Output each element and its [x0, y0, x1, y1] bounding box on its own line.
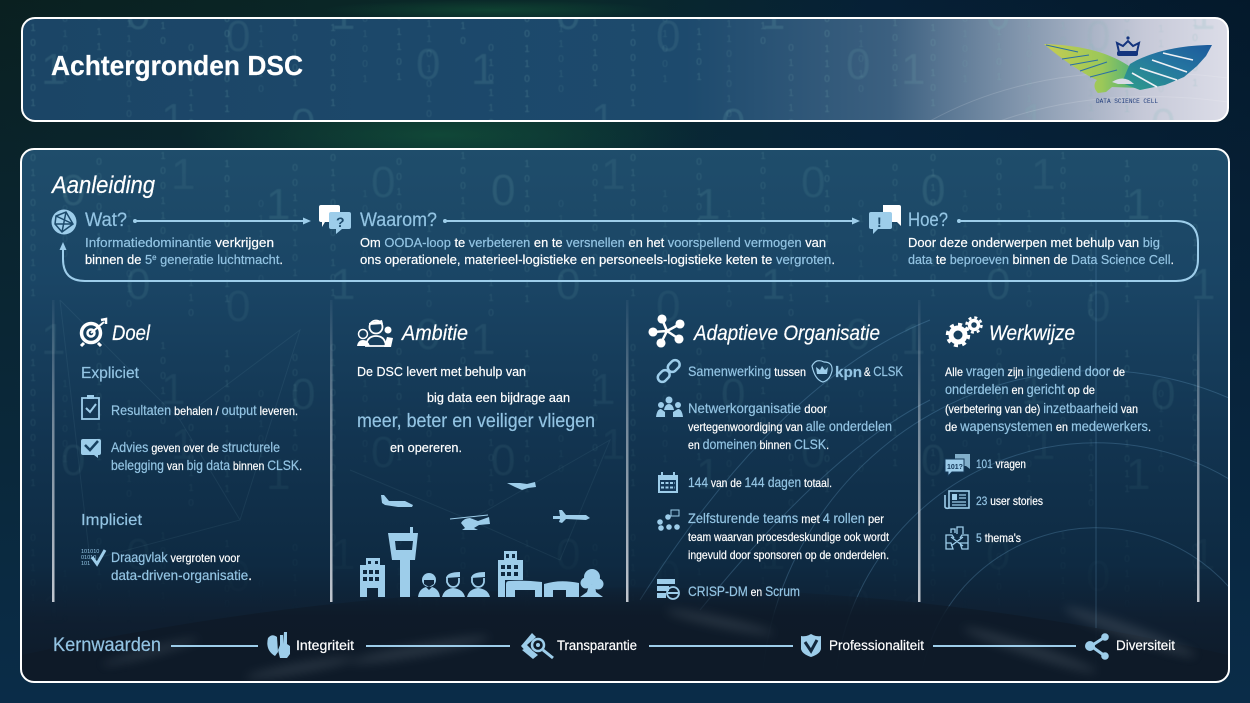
icon: soldier: [442, 572, 465, 597]
text: draagvlak: data-driven-organisatie.: [111, 567, 252, 583]
icon: target: [81, 319, 106, 346]
logo: kpn: kpn: [835, 364, 862, 381]
icon: user stories: [945, 491, 969, 508]
icon: binary check: 101010: [81, 549, 99, 555]
label: transparantie: Transparantie: [557, 638, 637, 653]
icon: hub network: [650, 316, 683, 346]
icon: network people: [656, 396, 683, 417]
connector lines: [171, 645, 1076, 647]
text: netwerkorganisatie: vertegenwoordiging van alle onderdelen: [688, 418, 892, 434]
icon: helicopter: [450, 515, 490, 530]
icon: calendar: [658, 472, 678, 493]
skyline illustration: [360, 527, 604, 597]
logo: kpn: [812, 361, 862, 382]
icon: advice check bubble: [81, 439, 101, 458]
logo: data science cell eagle: DATA SCIENCE CELL: [1096, 98, 1158, 105]
label: diversiteit: Diversiteit: [1116, 638, 1175, 653]
wat text: generatie luchtmacht: [157, 252, 280, 267]
heading: adaptieve organisatie: Adaptieve Organisatie: [692, 322, 880, 345]
text: werkwijze description: Alle vragen zijn ingediend door de: [945, 363, 1125, 379]
icon: oath hand with heart: [267, 632, 290, 658]
icon: office building: [360, 558, 385, 597]
icon: binary check: [81, 549, 105, 567]
text: werkwijze description: onderdelen en gericht op de: [945, 381, 1095, 397]
earth horizon: [227, 588, 1096, 681]
column: doel: [81, 319, 302, 583]
arrow: wat to waarom: [133, 218, 311, 224]
text: ambitie statement: [357, 364, 595, 455]
icon: 101 questions: 101?: [947, 464, 963, 471]
icon: share nodes: [1085, 633, 1109, 660]
icon: clipboard check: [82, 395, 99, 419]
waarom text: ons operationele, materieel-logistieke en personeels-logistieke keten te vergroten.: [360, 252, 835, 267]
waarom text: Om OODA-loop te verbeteren en te versnellen en het voorspellend vermogen van: [360, 235, 826, 250]
subheading: expliciet: Expliciet: [81, 365, 140, 382]
icon: network globe: [52, 210, 76, 234]
icon: 101 questions: [945, 454, 970, 476]
text: draagvlak: [111, 549, 252, 583]
icon: pilot: [418, 573, 440, 597]
text: 5 themas: 5 thema's: [976, 531, 1021, 545]
icon: transparency magnifier: [521, 633, 553, 659]
wat text: e: [152, 253, 157, 262]
icon: binary check: 101: [81, 561, 90, 567]
text: and clsk: & CLSK: [864, 363, 904, 379]
hoe text: [908, 235, 1174, 267]
icon: question speech bubbles: [319, 205, 351, 234]
text: netwerkorganisatie: en domeinen binnen CLSK.: [688, 436, 829, 452]
text: ambitie statement: en opereren.: [390, 440, 462, 455]
text: werkwijze description: [945, 363, 1151, 434]
section: aanleiding: [50, 172, 1198, 281]
text: werkwijze description: de wapensystemen en medewerkers.: [945, 418, 1151, 434]
icon: themes: [946, 527, 968, 549]
wat text: [85, 235, 283, 267]
wat text: .: [279, 252, 283, 267]
icon: medic: [467, 572, 490, 597]
icon: exclamation speech bubbles: !: [877, 214, 882, 230]
text: werkwijze description: (verbetering van de) inzetbaarheid van: [945, 400, 1138, 416]
wat heading: Wat?: [85, 210, 127, 231]
text: netwerkorganisatie: [688, 400, 892, 452]
text: 144 dagen: 144 van de 144 dagen totaal.: [688, 474, 832, 490]
icon: chain link: [656, 358, 681, 384]
heading: kernwaarden: Kernwaarden: [53, 635, 161, 656]
title: Achtergronden DSC: [51, 50, 303, 81]
waarom heading: Waarom?: [360, 210, 437, 231]
heading: aanleiding: Aanleiding: [50, 172, 156, 199]
text: draagvlak: Draagvlak vergroten voor: [111, 549, 240, 565]
text: ambitie statement: De DSC levert met behulp van: [357, 364, 526, 379]
wat text: Informatiedominantie verkrijgen: [85, 235, 274, 250]
icon: crisp-dm cycle: [657, 579, 679, 599]
waarom text: [360, 235, 835, 267]
label: professionaliteit: Professionaliteit: [829, 638, 924, 653]
icon: question speech bubbles: ?: [336, 214, 345, 230]
hoe heading: Hoe?: [908, 210, 948, 231]
heading: doel: Doel: [112, 322, 151, 345]
icon: building with hangars: [498, 551, 579, 597]
icon: exclamation speech bubbles: [869, 205, 901, 234]
text: ambitie statement: big data een bijdrage aan: [427, 390, 570, 405]
text: resultaten: Resultaten behalen / output leveren.: [111, 402, 298, 418]
text: samenwerking: Samenwerking tussen: [688, 363, 806, 379]
dividers: [52, 300, 1200, 602]
icon: control tower: [388, 527, 418, 597]
text: zelfsturende teams: Zelfsturende teams met 4 rollen per: [688, 510, 884, 526]
panel: header: [22, 18, 1228, 121]
heading: werkwijze: Werkwijze: [989, 322, 1075, 345]
icon: tree: [580, 569, 604, 597]
hoe text: Door deze onderwerpen met behulp van big: [908, 235, 1160, 250]
heading: ambitie: Ambitie: [400, 322, 468, 345]
text: zelfsturende teams: [688, 510, 890, 562]
text: advies: [111, 439, 302, 473]
icon: personnel: [357, 320, 393, 347]
icon: binary check: 01010: [81, 555, 96, 561]
icon: gears: [948, 318, 982, 346]
arrow: hoe loop back to wat: [60, 219, 1198, 281]
panel: main: [21, 149, 1229, 682]
icon: self-organising team: [657, 510, 680, 531]
text: 23 user stories: 23 user stories: [976, 494, 1043, 508]
text: zelfsturende teams: team waarvan procesdeskundige ook wordt: [688, 530, 890, 544]
column: ambitie: [357, 320, 604, 597]
hoe text: data te beproeven binnen de Data Science Cell.: [908, 252, 1174, 267]
row: kernwaarden: [53, 632, 1175, 660]
column: adaptieve organisatie: [650, 316, 904, 599]
subheading: impliciet: Impliciet: [81, 512, 143, 529]
label: integriteit: Integriteit: [296, 638, 354, 653]
text: netwerkorganisatie: Netwerkorganisatie door: [688, 400, 827, 416]
arrow: waarom to hoe: [443, 218, 860, 224]
text: zelfsturende teams: ingevuld door sponsoren op de onderdelen.: [688, 548, 889, 562]
wat text: binnen de 5: [85, 252, 152, 267]
logo: data science cell eagle: [1044, 36, 1212, 105]
icon: drone: [553, 510, 590, 523]
text: 101 vragen: 101 vragen: [976, 457, 1026, 471]
icon: fighter jet: [507, 482, 536, 490]
icon: shield check: [801, 634, 821, 657]
icon: transport plane: [381, 495, 413, 507]
text: crisp-dm en scrum: CRISP-DM en Scrum: [688, 583, 800, 599]
column: werkwijze: [945, 318, 1151, 549]
text: advies: Advies geven over de structurele: [111, 439, 280, 455]
text: advies: belegging van big data binnen CLSK.: [111, 457, 302, 473]
text: ambitie statement: meer, beter en veiliger vliegen: [357, 411, 595, 432]
